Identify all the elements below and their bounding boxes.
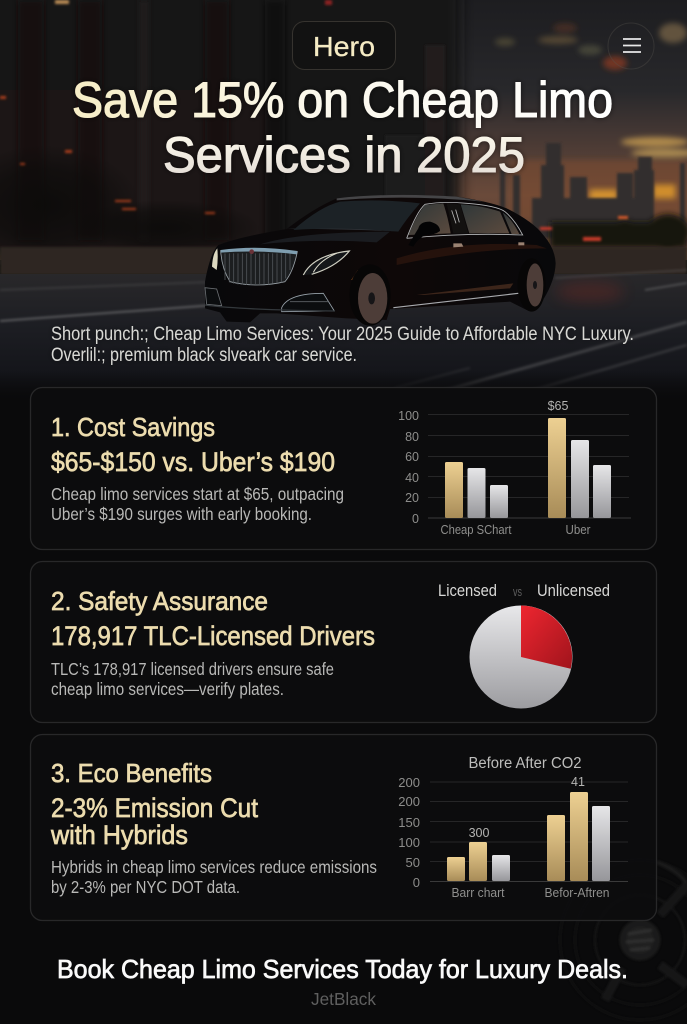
body: eco benefits	[51, 857, 377, 897]
brand name: JetBlack	[311, 989, 376, 1009]
panel: safety assurance	[30, 562, 656, 722]
limo body	[205, 195, 556, 322]
bar chart: cost comparison: 100	[398, 409, 419, 423]
bar chart: before and after CO2: 41	[571, 775, 585, 789]
stat: licensed drivers: 178,917 TLC-Licensed Drivers	[51, 621, 375, 651]
road	[0, 274, 687, 400]
body: safety assurance	[51, 659, 334, 699]
body: safety assurance: cheap limo services—verify plates.	[51, 679, 284, 699]
pie chart: licensed vs unlicensed: Unlicensed	[537, 582, 610, 600]
pie chart: licensed vs unlicensed: Licensed	[438, 582, 497, 600]
skyline	[500, 143, 685, 238]
bar chart: cost comparison: 80	[405, 430, 419, 444]
bar chart: cost comparison: Cheap SChart	[440, 522, 512, 537]
limousine	[205, 195, 556, 326]
pie chart: licensed vs unlicensed	[438, 582, 610, 708]
body: eco benefits: by 2-3% per NYC DOT data.	[51, 877, 240, 897]
side mirror	[408, 222, 440, 247]
bar chart: before and after CO2: Before After CO2	[468, 755, 582, 772]
bar chart: cost comparison: 40	[405, 471, 419, 485]
hero badge	[292, 22, 396, 70]
lower bumper intakes	[282, 293, 334, 312]
decorative wheel watermark	[560, 860, 687, 1020]
front wheel	[349, 264, 391, 326]
headlights	[303, 251, 349, 275]
bar chart: cost comparison: 60	[405, 450, 419, 464]
hero badge: Hero	[313, 31, 375, 62]
body: safety assurance: TLC’s 178,917 licensed drivers ensure safe	[51, 659, 334, 679]
body: eco benefits: Hybrids in cheap limo services reduce emissions	[51, 857, 377, 877]
bar chart: cost comparison: 0	[412, 512, 419, 526]
stat: emission cut: with Hybrids	[50, 820, 188, 850]
rear wheel	[518, 258, 546, 312]
bar chart: before and after CO2	[398, 755, 628, 900]
intro text: Overlil:; premium black slveark car service.	[51, 345, 357, 366]
side windows	[407, 202, 523, 238]
body: cost savings	[51, 484, 344, 524]
panel: cost savings	[30, 388, 656, 550]
bar chart: before and after CO2: 200	[398, 775, 420, 790]
hazy foreground foliage at left	[0, 145, 260, 265]
stat: emission cut: 2-3% Emission Cut	[51, 793, 258, 823]
bar chart: before and after CO2: 0	[413, 875, 420, 890]
bar chart: cost comparison: 20	[405, 491, 419, 505]
bar chart: before and after CO2: 300	[469, 826, 489, 840]
bar chart: before and after CO2: 50	[406, 855, 420, 870]
bar chart: before and after CO2: Barr chart	[452, 885, 505, 900]
highway barrier	[0, 247, 687, 275]
hood reflection	[260, 232, 390, 244]
grille	[221, 249, 297, 285]
roof highlight	[337, 195, 483, 202]
bar chart: before and after CO2: 100	[398, 835, 420, 850]
heading: eco benefits: 3. Eco Benefits	[51, 758, 212, 788]
body: cost savings: Uber’s $190 surges with early booking.	[51, 504, 312, 524]
windshield	[293, 200, 420, 232]
stat: price comparison: $65-$150 vs. Uber’s $190	[51, 447, 335, 477]
stat: emission cut	[50, 793, 258, 850]
title: Save 15% on Cheap Limo	[72, 72, 613, 128]
title: Services in 2025	[163, 127, 525, 183]
icon: menu	[608, 23, 654, 69]
door side reflections	[397, 244, 547, 265]
red city lights	[0, 0, 628, 241]
panel: eco benefits	[30, 734, 656, 920]
title	[72, 72, 613, 183]
heading: safety assurance: 2. Safety Assurance	[51, 586, 268, 616]
background photo: city at dusk	[0, 0, 687, 400]
pie chart: licensed vs unlicensed: vs	[513, 584, 522, 599]
heading: cost savings: 1. Cost Savings	[51, 412, 215, 442]
body: cost savings: Cheap limo services start at $65, outpacing	[51, 484, 344, 504]
bar chart: cost comparison	[398, 399, 631, 537]
bar chart: before and after CO2: 200	[398, 794, 420, 809]
bar chart: before and after CO2: 150	[398, 815, 420, 830]
call to action: Book Cheap Limo Services Today for Luxury Deals.	[57, 954, 628, 984]
intro text	[51, 324, 634, 366]
bar chart: cost comparison: $65	[548, 399, 568, 413]
bar chart: before and after CO2: Befor-Aftren	[544, 885, 610, 900]
bar chart: cost comparison: Uber	[566, 522, 591, 537]
